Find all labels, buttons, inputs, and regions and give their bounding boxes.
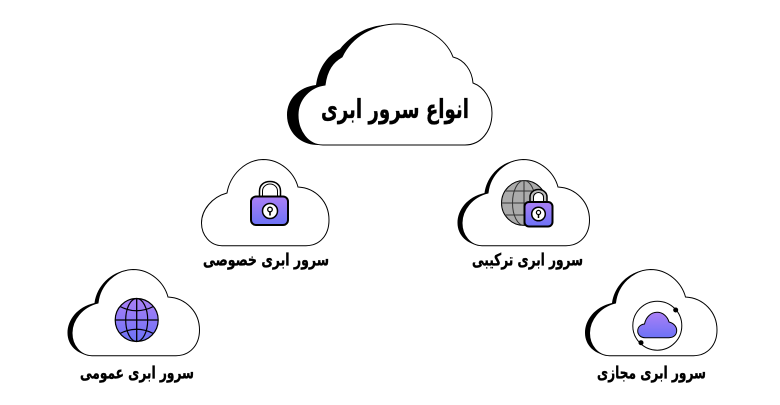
main cloud body — [298, 24, 492, 145]
hybrid cloud shadow — [458, 160, 530, 246]
hybrid cloud body — [462, 160, 590, 246]
main cloud with title — [287, 24, 492, 145]
virtual label: سرور ابری مجازی — [597, 364, 706, 384]
private label: سرور ابری خصوصی — [203, 250, 329, 270]
icon: orbiting cloud — [633, 301, 682, 350]
virtual cloud — [585, 270, 717, 384]
public cloud shadow — [68, 270, 140, 356]
virtual cloud body — [590, 270, 717, 356]
title: انواع سرور ابری — [321, 95, 469, 125]
private cloud — [202, 160, 329, 270]
hybrid label: سرور ابری ترکیبی — [472, 250, 583, 270]
icon: globe with padlock — [502, 180, 552, 226]
public cloud — [68, 270, 200, 384]
icon: globe — [115, 298, 158, 342]
private cloud outline — [202, 160, 329, 246]
public cloud body — [72, 270, 200, 356]
main cloud shadow — [287, 25, 420, 145]
icon: padlock — [251, 182, 288, 225]
hybrid cloud — [458, 160, 590, 270]
public label: سرور ابری عمومی — [80, 364, 194, 384]
virtual cloud shadow — [585, 270, 658, 356]
